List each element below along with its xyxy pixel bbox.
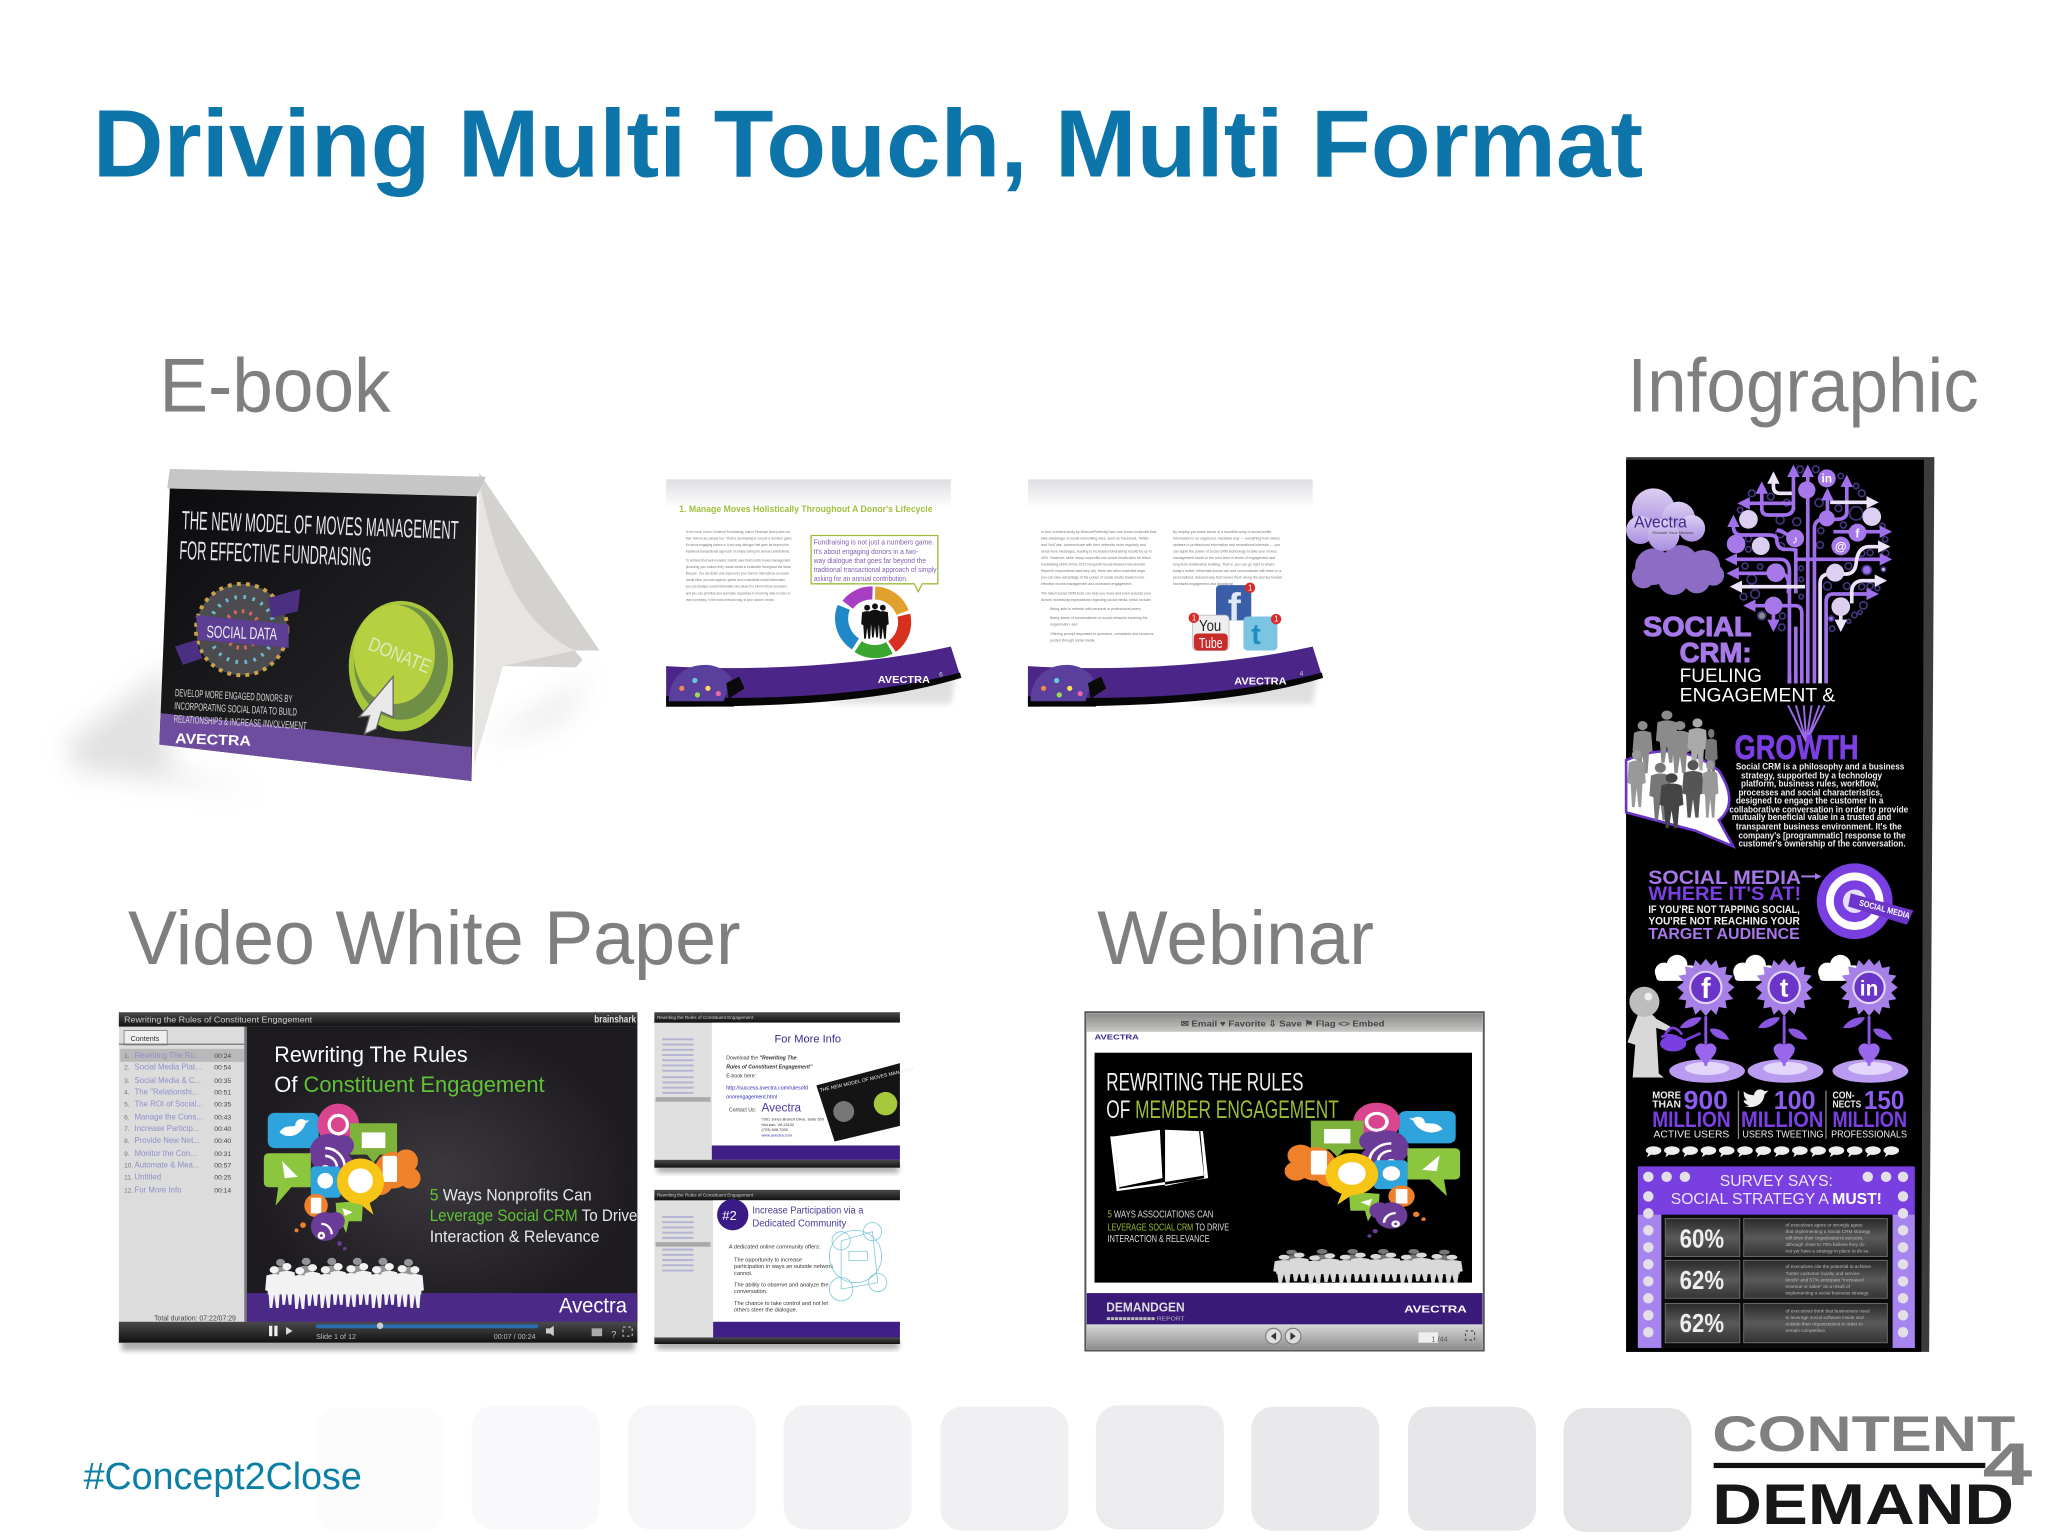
survey row 62% (1665, 1260, 1887, 1298)
page body text: lifecycle. You can listen and respond to your donors' interactions on social (686, 571, 789, 576)
trunk base (1789, 673, 1796, 683)
title: Driving Multi Touch, Multi Format (93, 91, 1643, 197)
tapering lines (1788, 705, 1825, 742)
download text: McLean, VA 22102 (761, 1122, 794, 1127)
tree purple branches (1733, 473, 1883, 683)
download text: E-book here: (726, 1074, 756, 1080)
growth paragraph: strategy, supported by a technology (1741, 770, 1883, 780)
page body column one: Being able to network with personal or professional peers; (1050, 607, 1141, 611)
callout (811, 536, 938, 592)
stat: 150 million: CON- (1832, 1090, 1855, 1101)
social tree (1727, 466, 1889, 683)
speech bubble with people (1626, 711, 1733, 846)
survey row 62%: of executives cite the potential to achieve (1785, 1264, 1871, 1269)
logo: Content 4 Demand (1712, 1406, 2033, 1536)
callout: asking for an annual contribution. (814, 576, 908, 583)
growth heading: GROWTH (1735, 729, 1859, 767)
toolbar: ✉ Email ♥ Favorite ⇩ Save ⚑ Flag <> Embed (1181, 1019, 1384, 1029)
survey heading (1671, 1173, 1882, 1208)
callout: way dialogue that goes far beyond the (813, 558, 926, 565)
social tree: f (1855, 526, 1860, 540)
heading: Infographic: Infographic (1627, 343, 1979, 428)
panel: e-book cover (65, 469, 600, 792)
logo: Content 4 Demand: DEMAND (1712, 1473, 2014, 1536)
callout: It's about engaging donors in a two- (814, 549, 918, 556)
heading: Webinar: Webinar (1097, 896, 1374, 981)
player title bar: brainshark (594, 1015, 637, 1026)
panel: video slide, Increase Participation (654, 1190, 900, 1349)
survey row 60%: will drive their organization's success, (1785, 1236, 1863, 1241)
page body column one: fundraising (46% of the 2012 Nonprofit Social Network Benchmark (1041, 562, 1145, 567)
growth paragraph: Social CRM is a philosophy and a business (1736, 761, 1904, 771)
page body column two: can apply the power of social CRM technology to take your moves (1173, 549, 1277, 554)
contents sidebar: 12. (124, 1187, 133, 1194)
flower: facebook: f (1701, 973, 1711, 1005)
social data globe (175, 584, 300, 675)
social media heading (1648, 867, 1801, 943)
survey row 62%: revenue or sales" as a result of (1785, 1284, 1851, 1289)
page body column two: management model to the next level in terms of engagement and (1173, 556, 1275, 560)
page body text: It's about engaging donors in a two-way dialogue that goes far beyond the (686, 543, 789, 547)
book spine top (167, 469, 486, 496)
slide heading: Rewriting The Rules (274, 1042, 468, 1067)
contents sidebar: Manage the Cons... (135, 1112, 203, 1121)
infographic title (1643, 611, 1835, 706)
download text: Avectra (761, 1102, 802, 1115)
page body column one: effective moves management and increased engagement. (1041, 582, 1132, 586)
bullet list: conversation. (734, 1289, 768, 1295)
growth paragraph: collaborative conversation in order to provide (1729, 804, 1908, 814)
icon: social bubbles (264, 1104, 421, 1250)
page body column one (1041, 530, 1157, 642)
download text: 7901 Jones Branch Drive, Suite 500 (761, 1117, 825, 1122)
download text: onorengagement.html (726, 1094, 777, 1100)
contents sidebar: 00:51 (214, 1090, 231, 1097)
Avectra footer logo: AVECTRA (1234, 676, 1287, 687)
contents sidebar: Monitor the Con... (135, 1149, 197, 1158)
survey row 62% second: of executives think that businesses need (1785, 1309, 1870, 1314)
bullet list: The opportunity to increase (734, 1258, 802, 1264)
survey row 60%: that implementing a Social CRM strategy (1785, 1229, 1871, 1234)
sidebar rows (656, 1216, 711, 1272)
contents sidebar: 2. (124, 1065, 130, 1072)
webinar heading (1106, 1070, 1339, 1124)
contents sidebar: 9. (124, 1151, 130, 1158)
flower: twitter: t (1780, 973, 1789, 1003)
download text: http://success.avectra.com/rulesofd (726, 1085, 808, 1091)
infographic title: SOCIAL (1643, 611, 1752, 642)
page number: 4 (1300, 670, 1304, 677)
stat: 900 million: 900 (1684, 1085, 1728, 1115)
social tree: @ (1835, 540, 1847, 554)
sponsor band: ■■■■■■■■■■■■ REPORT (1106, 1316, 1185, 1322)
contents sidebar: 00:57 (214, 1163, 231, 1170)
infographic title: FUELING (1680, 665, 1762, 687)
panel: video player main (119, 1012, 637, 1351)
icon: YouTube badge: You (1199, 618, 1221, 635)
icon: open book (1110, 1130, 1208, 1191)
survey row 62% second: outside their organizations in order to (1785, 1322, 1863, 1327)
contents sidebar: 00:25 (214, 1174, 231, 1181)
clouds with Avectra logo: Avectra (1634, 513, 1687, 532)
page body column one: 40%. However, while many nonprofits use social media sites for direct (1041, 556, 1151, 560)
growth paragraph: customer's ownership of the conversation. (1738, 838, 1906, 848)
page body column two: long-term relationship building. That is, you can go right to where (1173, 562, 1275, 567)
donate button: DONATE (365, 633, 434, 678)
cover description: INCORPORATING SOCIAL DATA TO BUILD (174, 701, 297, 719)
page body column one: Report's respondents said they do), there are other essential ways (1041, 569, 1145, 573)
slide heading: For More Info (775, 1033, 841, 1045)
stat: 900 million (1652, 1085, 1731, 1141)
social media heading: TARGET AUDIENCE (1648, 926, 1800, 943)
icon: facebook badge: f (1228, 586, 1242, 629)
stat: 150 million: PROFESSIONALS (1831, 1130, 1907, 1141)
panel: e-book page 4 (1028, 479, 1323, 707)
flower: twitter (1733, 955, 1823, 1083)
download text: (703) 506.7000 (761, 1127, 789, 1132)
Avectra wordmark: AVECTRA (175, 731, 251, 750)
contents sidebar: 00:35 (214, 1078, 231, 1085)
stat: 150 million: 150 (1864, 1085, 1904, 1115)
icon: Twitter badge: 1 (1274, 615, 1278, 624)
infographic title: ENGAGEMENT & (1680, 684, 1835, 706)
flower: facebook (1655, 955, 1745, 1083)
slide subheading: Leverage Social CRM To Drive (430, 1207, 637, 1225)
sidebar rows (656, 1038, 711, 1102)
infographic title: CRM: (1680, 637, 1752, 668)
crowd silhouette (265, 1258, 424, 1309)
webinar subtitle: LEVERAGE SOCIAL CRM TO DRIVE (1108, 1222, 1229, 1233)
page body column one: send more messages, leading to increased fundraising results by up to (1041, 549, 1152, 554)
cover description: DEVELOP MORE ENGAGED DONORS BY (175, 688, 293, 705)
slide (247, 1027, 637, 1323)
page body column two: today's active, influential donors are and communicate with them in a (1173, 569, 1282, 573)
page body text: you can analyze social information and allow it to inform future decisions; (686, 584, 788, 589)
stat: 100 million: 100 (1774, 1085, 1816, 1115)
bullet list: cannot. (734, 1271, 753, 1277)
heading: E-book: E-book (159, 343, 391, 428)
contents sidebar: 6. (124, 1114, 130, 1121)
contents sidebar: 00:35 (214, 1101, 231, 1108)
bullet list: The ability to observe and analyze the (734, 1283, 829, 1289)
page body column two: By helping you make sense of a bountiful array of social profile (1173, 530, 1271, 534)
icon: Twitter badge (1243, 614, 1281, 651)
stat: 100 million (1741, 1085, 1823, 1141)
target icon: SOCIAL MEDIA (1858, 897, 1911, 921)
page body text (686, 530, 793, 602)
survey row 60%: 60% (1680, 1223, 1724, 1253)
community network diagram (829, 1223, 887, 1301)
footer tile strip (316, 1405, 1691, 1532)
cover title (179, 505, 459, 575)
arrow (1801, 875, 1817, 877)
page body column two: personalized, relevant way that moves them along the journey toward (1173, 575, 1282, 580)
contents sidebar: Untitled (135, 1172, 161, 1181)
icon: YouTube badge: Tube (1199, 636, 1223, 652)
book pages (474, 473, 600, 764)
growth paragraph: transparent business environment. It's the (1736, 821, 1902, 831)
social media heading: SOCIAL MEDIA (1648, 867, 1801, 889)
survey row 62% second: 62% (1680, 1308, 1724, 1338)
crowd silhouette (1273, 1249, 1463, 1284)
contents sidebar: 5. (124, 1101, 130, 1108)
survey row 62%: "better customer loyalty and service (1785, 1271, 1860, 1276)
page body column one: In fact, a recent study by NetworkPerfectlyCare.com found nonprofits that (1041, 530, 1157, 534)
contents sidebar: For More Info (135, 1185, 182, 1194)
growth paragraph (1729, 761, 1908, 848)
survey row 62% second: to leverage social software inside and (1785, 1315, 1864, 1320)
stat: 900 million: ACTIVE USERS (1654, 1130, 1729, 1141)
growth paragraph: platform, business rules, workflow, (1741, 778, 1878, 788)
bullet list: A dedicated online community offers: (729, 1245, 821, 1251)
clouds with Avectra logo: Elevate Your Mission (1652, 530, 1693, 535)
player controls: ? (611, 1329, 616, 1339)
cover title: FOR EFFECTIVE FUNDRAISING (179, 535, 372, 572)
hashtag: #Concept2Close (84, 1456, 362, 1498)
stat: 150 million: NECTS (1832, 1100, 1861, 1111)
contents sidebar: Provide New Net... (135, 1136, 200, 1145)
page body column one: you can take advantage of the power of social media toward more (1041, 575, 1145, 580)
icon: YouTube badge (1189, 613, 1229, 652)
slide subheading (430, 1186, 637, 1246)
contents sidebar: 00:24 (214, 1053, 231, 1060)
contents sidebar: Automate & Mea... (135, 1161, 199, 1170)
stat: 150 million: MILLION (1832, 1107, 1907, 1132)
player title bar (119, 1012, 637, 1027)
survey row 62% second: remain competitive. (1785, 1328, 1826, 1333)
survey row 62% second (1665, 1304, 1887, 1343)
contents sidebar (119, 1027, 247, 1322)
flower: linkedin: in (1860, 977, 1878, 1000)
download text: Contact Us: (729, 1108, 756, 1114)
bullet list: others steer the dialogue. (734, 1307, 798, 1313)
growth paragraph: processes and social characteristics, (1738, 787, 1882, 797)
page body column one: donors' increasing expectations regarding social media, which include: (1041, 598, 1152, 602)
donate button (349, 601, 453, 734)
page body text: In her book, Donor-Centered Fundraising, author Penelope Burk points out (686, 530, 790, 534)
sponsor band: DEMANDGEN (1106, 1299, 1185, 1314)
slide heading line two: Of Constituent Engagement (274, 1072, 545, 1097)
icon: social bubbles (1285, 1103, 1460, 1238)
social tree: ♪ (1792, 532, 1798, 546)
cover description (173, 688, 309, 732)
survey row 60%: although close to 70% believe they do (1785, 1242, 1865, 1247)
page body text: and you can prioritize and automate responses to incoming data in order to (686, 591, 790, 595)
page body column two (1173, 530, 1282, 586)
download text (726, 1055, 825, 1137)
player controls (119, 1322, 637, 1343)
panel: e-book cover: THE NEW MODEL OF MOVES MANAGEMENT (181, 505, 459, 545)
webinar slide (1095, 1053, 1472, 1284)
page body column one: Being aware of conversations on social networks involving the (1050, 616, 1148, 620)
tree icon discs (1727, 469, 1866, 615)
page body text: To achieve that well-rounded, holistic view that boosts moves management (686, 558, 790, 563)
contents sidebar: Increase Particip... (135, 1124, 199, 1133)
page body column one: take advantage of social networking sites, such as Facebook, Twitter (1041, 536, 1149, 540)
social data globe: SOCIAL DATA (206, 622, 278, 644)
panel: e-book page 6 (666, 479, 961, 707)
bullet list: The chance to take control and not let (734, 1301, 828, 1307)
social media heading: YOU'RE NOT REACHING YOUR (1648, 916, 1800, 928)
cover description: RELATIONSHIPS & INCREASE INVOLVEMENT (173, 714, 307, 732)
webinar controls (1087, 1324, 1482, 1349)
survey row 60% (1665, 1219, 1887, 1256)
contents sidebar: Rewriting The Ru... (135, 1051, 201, 1060)
contents sidebar: 1. (124, 1053, 130, 1060)
page body column one: posted through social media. (1050, 638, 1096, 642)
page number: 6 (939, 672, 943, 679)
survey heading: SOCIAL STRATEGY A MUST! (1671, 1191, 1882, 1208)
icon: Twitter badge: t (1251, 619, 1261, 651)
survey row 62%: levels" and 57% anticipate "increased (1785, 1277, 1864, 1282)
contents sidebar: 00:31 (214, 1151, 231, 1158)
survey row 60%: of executives agree or strongly agree (1785, 1222, 1863, 1227)
social media heading: IF YOU'RE NOT TAPPING SOCIAL, (1648, 904, 1800, 916)
bullet list: participation in ways an outside network (734, 1264, 833, 1270)
contents sidebar: 00:40 (214, 1126, 231, 1133)
number badge: #2 (722, 1208, 737, 1223)
e-book cover thumbnail: THE NEW MODEL OF MOVES MANAGEM (819, 1066, 914, 1094)
survey panel (1638, 1166, 1915, 1348)
survey heading: SURVEY SAYS: (1720, 1173, 1833, 1190)
front cover (159, 488, 477, 781)
contents sidebar: 4. (124, 1090, 130, 1097)
page body column one: and YouTube, communicate with their networks more regularly and (1041, 543, 1146, 547)
page body text: media sites; you can capture, gather and consolidate social information; (686, 578, 786, 582)
social media heading: WHERE IT'S AT! (1648, 883, 1801, 905)
slide heading: Dedicated Community (752, 1218, 846, 1229)
e-book cover thumbnail (816, 1063, 914, 1142)
contents sidebar: Social Media Plat... (135, 1063, 202, 1072)
page body text: (including your bottom line), social media is invaluable throughout the donor (686, 565, 792, 569)
download text: www.avectra.com (761, 1132, 792, 1137)
logo: Content 4 Demand: 4 (1983, 1431, 2033, 1498)
growth paragraph: designed to engage the customer in a (1736, 795, 1884, 805)
number badge (717, 1199, 748, 1230)
contents sidebar: Social Media & C... (135, 1076, 201, 1085)
target icon (1817, 863, 1913, 939)
icon: facebook badge (1216, 583, 1255, 629)
contents sidebar: 00:40 (214, 1138, 231, 1145)
callout: traditional transactional approach of simply (814, 567, 937, 574)
stat: 900 million: THAN (1652, 1100, 1681, 1111)
slide heading (752, 1205, 864, 1229)
figure with watering can (1627, 987, 1701, 1078)
stat: 150 million (1831, 1085, 1907, 1141)
callout: Fundraising is not just a numbers game. (814, 540, 934, 547)
contents sidebar: 00:43 (214, 1114, 231, 1121)
contents sidebar: Contents (131, 1035, 160, 1043)
page heading: 1. Manage Moves Holistically Throughout A Donor's Lifecycle (679, 504, 933, 514)
chat bubble row (1646, 1146, 1899, 1157)
contents sidebar: 11. (124, 1174, 133, 1181)
contents sidebar: 00:54 (214, 1065, 231, 1072)
icon: YouTube badge: 1 (1192, 613, 1196, 622)
contents sidebar: 10. (124, 1163, 133, 1170)
stat: 100 million: USERS TWEETING (1742, 1130, 1823, 1141)
page body column one: Offering prompt responses to questions, complaints and concerns (1050, 632, 1154, 636)
survey row 62%: 62% (1680, 1265, 1724, 1295)
player controls: 00:07 / 00:24 (494, 1333, 536, 1341)
Avectra logo small: AVECTRA (1095, 1034, 1139, 1042)
contents sidebar: 8. (124, 1138, 130, 1145)
panel: video slide, For More Info: Rewriting the Rules of Constituent Engagement (657, 1015, 754, 1020)
player title bar: Rewriting the Rules of Constituent Engagement (124, 1015, 313, 1025)
heading: Video White Paper: Video White Paper (128, 896, 741, 981)
stat: 100 million: MILLION (1741, 1107, 1823, 1132)
panel: infographic (1626, 457, 1934, 1352)
stat: 900 million: MILLION (1652, 1107, 1731, 1132)
slide subheading: 5 Ways Nonprofits Can (430, 1186, 592, 1204)
social tree: in (1821, 472, 1832, 486)
slide subheading: Interaction & Relevance (430, 1228, 600, 1246)
tree dim icons (1737, 466, 1889, 631)
clouds with Avectra logo (1626, 488, 1724, 595)
page body column two: updates to professional information and recreational interests — you (1173, 543, 1280, 547)
flower: linkedin (1818, 955, 1908, 1083)
contents sidebar: The "Relationshi... (135, 1088, 198, 1097)
page body text: reach promptly, in the most relevant way, to your donors' needs. (686, 597, 775, 602)
slide heading: Increase Participation via a (752, 1205, 864, 1216)
page body column one: The latest social CRM tools can help you meet and even surpass your (1041, 591, 1152, 595)
page body column one: organization; and (1050, 622, 1077, 627)
growth paragraph: company's [programmatic] response to the (1738, 831, 1906, 841)
download text: Rules of Constituent Engagement" (726, 1064, 813, 1070)
icon: facebook badge: 1 (1248, 583, 1252, 592)
contents sidebar: Total duration: 07:22/07:29 (154, 1315, 236, 1322)
page body column two: increased engagement and donations! (1173, 582, 1233, 586)
logo: Content 4 Demand: CONTENT (1712, 1406, 2015, 1462)
contents sidebar: 7. (124, 1126, 130, 1133)
icon: lifecycle arrows (842, 593, 905, 652)
download text: Download the "Rewriting The (726, 1055, 797, 1061)
page body text: traditional transactional approach of simply asking for annual contributions. (686, 549, 790, 554)
webinar heading: OF MEMBER ENGAGEMENT (1106, 1097, 1339, 1124)
panel: video slide, Increase Participation: Rewriting the Rules of Constituent Engagement (657, 1192, 754, 1197)
player controls: Slide 1 of 12 (316, 1333, 356, 1341)
contents sidebar: 3. (124, 1078, 130, 1085)
sponsor band: AVECTRA (1404, 1305, 1467, 1316)
page body text: that "donors are people too." That is, fundraising is not just a numbers game. (686, 536, 793, 541)
toolbar (1087, 1014, 1482, 1032)
contents sidebar: The ROI of Social... (135, 1099, 203, 1108)
growth paragraph: mutually beneficial value in a trusted and (1732, 812, 1891, 822)
webinar subtitle: 5 WAYS ASSOCIATIONS CAN (1108, 1209, 1213, 1220)
panel: video slide, For More Info (654, 1012, 914, 1173)
bullet list (729, 1245, 833, 1313)
tree white branches (1738, 480, 1882, 683)
panel: webinar player (1085, 1012, 1484, 1351)
survey row 60%: not yet have a strategy in place to do so. (1785, 1249, 1870, 1254)
sponsor band (1087, 1293, 1482, 1324)
stat: 900 million: MORE (1652, 1090, 1681, 1101)
survey lights (1643, 1172, 1908, 1337)
webinar subtitle: INTERACTION & RELEVANCE (1108, 1234, 1210, 1245)
survey row 62%: implementing a social business strategy. (1785, 1290, 1869, 1295)
Avectra logo: Avectra (559, 1295, 627, 1318)
webinar subtitle (1108, 1209, 1229, 1245)
webinar heading: REWRITING THE RULES (1106, 1070, 1304, 1097)
contents sidebar: 00:14 (214, 1187, 231, 1194)
Avectra footer logo: AVECTRA (878, 675, 930, 686)
cover footer band (159, 713, 472, 781)
webinar controls: 1 /44 (1432, 1335, 1447, 1343)
page body column two: information in an organized, trackable way — everything from status (1173, 536, 1280, 540)
